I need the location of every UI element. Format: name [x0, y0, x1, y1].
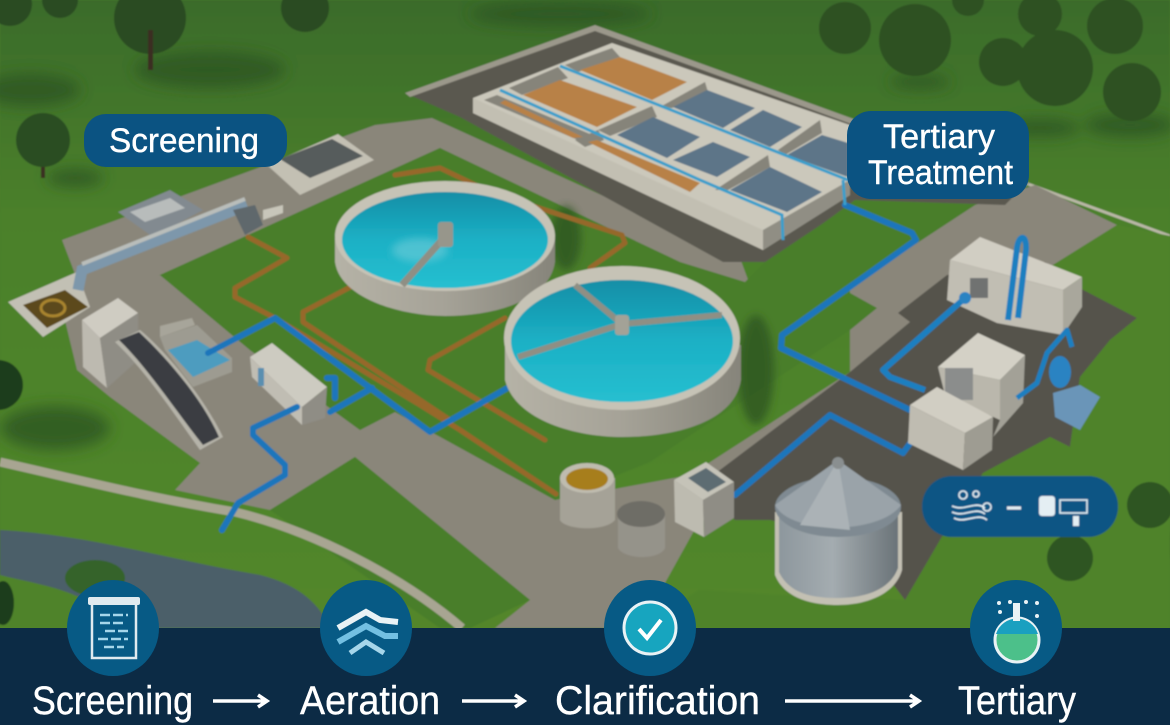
clarifier tank 2 [504, 266, 741, 437]
step label: Tertiary [958, 679, 1076, 723]
curb line upper right [1028, 184, 1170, 236]
sand filters [500, 57, 700, 192]
bay shadows [484, 48, 822, 190]
blue feed pipes [883, 298, 965, 390]
step: Tertiary [958, 580, 1076, 723]
grate top [280, 139, 363, 178]
building lower [938, 333, 1025, 380]
step: Aeration [300, 580, 440, 723]
grit pit [8, 272, 90, 337]
media filters [617, 90, 848, 212]
tertiary filter beds [473, 43, 850, 250]
step label: Aeration [300, 679, 440, 723]
building upper [950, 237, 1082, 290]
sludge digester and press [560, 462, 734, 557]
callout pill: process icons [922, 476, 1118, 537]
storage silo [775, 457, 902, 605]
icon: aeration waves [320, 580, 412, 676]
fine screen platform [267, 134, 374, 195]
conveyor ramp [115, 330, 223, 450]
bottom process band [0, 628, 1170, 725]
screen frame [118, 190, 203, 237]
clarifier tank 1 [335, 181, 555, 316]
trees: lower right [1047, 482, 1170, 581]
screening pit and screen machinery [8, 190, 283, 337]
step: Clarification [555, 580, 760, 723]
far riverbank [0, 575, 120, 628]
label: Tertiary Treatment: Treatment [868, 154, 1014, 192]
long pipe trough [78, 205, 247, 290]
tree: left [16, 113, 70, 178]
river [0, 530, 330, 628]
icon: screening jar [67, 580, 159, 676]
dark road around filter beds [405, 27, 1025, 262]
step: Screening [32, 580, 193, 723]
label: Screening [84, 114, 287, 167]
concrete curb path [0, 462, 462, 628]
icon: clarity check [604, 580, 696, 676]
blue treated-water pipes [208, 205, 927, 530]
gray roads [60, 118, 1117, 628]
arrow: aeration to clarification [462, 695, 524, 707]
step label: Screening [32, 679, 193, 723]
icon: flask [970, 580, 1062, 676]
central lawn [160, 148, 975, 628]
treeline: upper right [819, 0, 1161, 121]
arrow: screening to aeration [213, 695, 267, 707]
right buildings [883, 237, 1100, 470]
arrow: clarification to tertiary [785, 695, 919, 707]
label: Tertiary Treatment [847, 111, 1029, 199]
pump and box [1049, 356, 1071, 388]
conveyor building [82, 298, 232, 450]
step label: Clarification [555, 679, 760, 723]
label: Screening: Screening [109, 122, 259, 160]
shadows beside clarifiers [738, 315, 774, 425]
label: Tertiary Treatment: Tertiary [883, 118, 995, 156]
blower box [250, 343, 327, 425]
brown sludge pipes [235, 168, 625, 494]
tree: far left edge [0, 360, 23, 410]
blue channels [500, 66, 848, 240]
dark asphalt pad by buildings [700, 262, 1137, 600]
blue riser [1008, 238, 1026, 320]
treeline: upper left [0, 0, 329, 70]
aeration basin [160, 325, 232, 387]
